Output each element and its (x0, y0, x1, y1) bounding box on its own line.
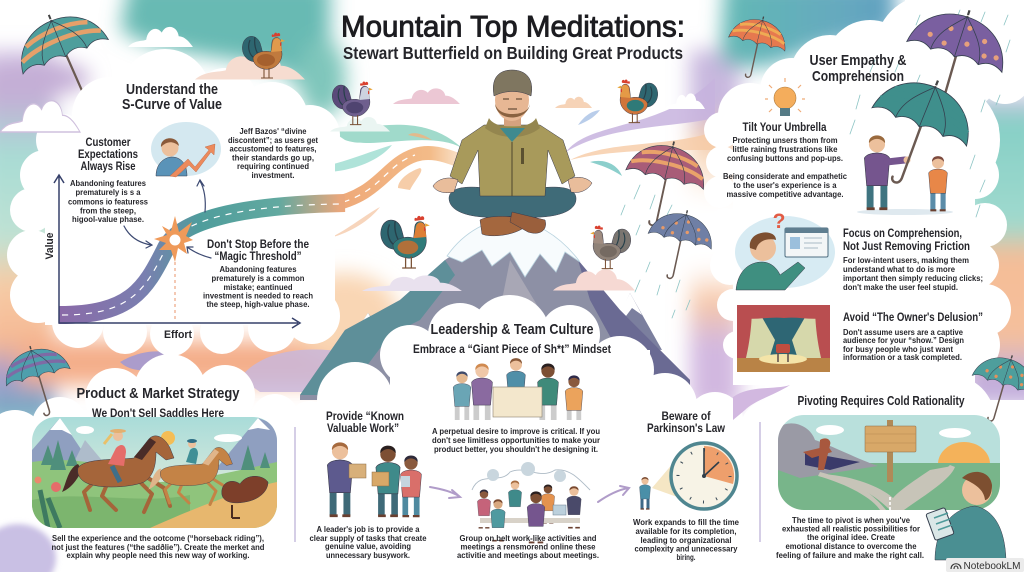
callout: magic threshold: the steep, high-value phase. (206, 300, 310, 309)
chart: S curve: Value (44, 232, 56, 260)
callout: divine discontent: Jeff Bazos' “divine (240, 127, 307, 136)
text: tilt your umbrella: Being considerate and empathetic (723, 172, 848, 181)
text: meetings (457, 534, 599, 560)
illustration: horseback riding (32, 417, 277, 528)
callout: divine discontent (228, 127, 318, 180)
callout: parkinson's law: Parkinson's Law (647, 423, 725, 435)
callout: customer expectations: Expectations (78, 149, 138, 161)
text: meetings: meetings a rensmorend online these (460, 542, 596, 552)
callout: magic threshold: “Magic Threshold” (214, 251, 302, 263)
callout: known valuable work: clear supply of tasks that create (310, 534, 427, 543)
arrows (124, 180, 211, 258)
icon: person with tablet (926, 472, 1006, 560)
callout: magic threshold (203, 239, 313, 309)
text: time to pivot: emotional distance to overcome the (786, 542, 917, 551)
callout: parkinson's law: complexity and unnecessary (634, 544, 738, 554)
callout: customer expectations (68, 137, 149, 224)
text: tilt your umbrella (723, 122, 848, 199)
rooster lower left (381, 216, 430, 268)
chart: S curve (44, 175, 345, 341)
callout: magic threshold: investment is needed to reach (203, 292, 313, 300)
title (341, 10, 685, 63)
umbrella: small orange (720, 10, 792, 85)
callout: parkinson's law: Beware of (662, 411, 711, 423)
chart: S curve: Effort (164, 329, 192, 341)
heading: Comprehension (812, 68, 904, 85)
heading (76, 385, 240, 420)
callout: divine discontent: discontent”; as users get (228, 136, 318, 145)
callout: parkinson's law: biring. (676, 553, 696, 562)
heading: Understand the (126, 81, 218, 98)
umbrella: centre blue dotted (639, 202, 719, 287)
text: tilt your umbrella: to the user's experience is a (734, 181, 837, 190)
illustration: forked road (778, 415, 1000, 510)
umbrella: purple dotted (889, 0, 1017, 129)
umbrella: bottom right (960, 346, 1024, 431)
illustration: empty stage (737, 305, 830, 372)
panel: user empathy (723, 52, 985, 372)
callout: divine discontent: investment. (252, 171, 294, 180)
text: perpetual desire: A perpetual desire to improve is critical. If you (432, 427, 600, 436)
title: Stewart Butterfield on Building Great Products (343, 43, 683, 63)
umbrella: top left striped (6, 0, 129, 125)
callout: customer expectations: prematurely is s a (76, 188, 141, 197)
callout: customer expectations: higool-value phase. (72, 215, 144, 224)
callout: customer expectations: Customer (86, 137, 131, 149)
callout: parkinson's law: available for its completion, (636, 527, 736, 536)
text: sell the experience: explain why people need this new way of working. (66, 551, 250, 560)
text: perpetual desire (432, 427, 600, 454)
panel: product and market strategy (32, 385, 277, 560)
text: time to pivot: feeling of failure and make the right call. (776, 551, 924, 560)
rooster top left (242, 33, 285, 78)
callout: known valuable work: Valuable Work” (327, 423, 399, 435)
callout: magic threshold: Abandoning features (220, 265, 297, 274)
text: owner's delusion (843, 312, 983, 362)
callout: parkinson's law: Work expands to fill the time (633, 518, 740, 527)
meditating man (433, 70, 592, 236)
heading: Pivoting Requires Cold Rationality (798, 393, 965, 408)
icon: confused user with window (735, 210, 835, 290)
text: tilt your umbrella: Protecting unsers thom from (732, 136, 838, 145)
arrow (598, 486, 629, 502)
text: tilt your umbrella: Tilt Your Umbrella (742, 122, 827, 134)
text: focus on comprehension: understand what to do is more (843, 265, 956, 274)
text: focus on comprehension: don't make the user feel stupid. (843, 283, 958, 292)
text: time to pivot: exhausted all realistic possibilities for (782, 524, 920, 534)
panel: pivoting (776, 393, 1006, 560)
text: time to pivot: The time to pivot is when you've (792, 516, 911, 525)
text: tilt your umbrella: little raining frustrations like (732, 145, 838, 154)
callout: parkinson's law (633, 411, 740, 562)
notebooklm badge: NotebookLM (964, 560, 1020, 572)
callout: magic threshold: Don't Stop Before the (207, 239, 309, 251)
heading: Embrace a “Giant Piece of Sh*t” Mindset (413, 342, 611, 356)
illustration: team holding sign (440, 358, 590, 434)
illustration: meeting (472, 462, 590, 542)
text: meetings: Group on belt work-like activities and (460, 534, 597, 543)
arrow (430, 487, 460, 498)
text: sell the experience (52, 534, 265, 560)
text: owner's delusion: information or a task completed. (843, 353, 962, 362)
umbrella: bottom left (0, 337, 80, 424)
panel: leadership and team culture (310, 321, 740, 562)
heading (810, 52, 907, 85)
text: owner's delusion: Don't assume users are a captive (843, 328, 964, 337)
heading: S-Curve of Value (122, 96, 222, 113)
callout: divine discontent: accustomed to features, (230, 144, 316, 154)
text: focus on comprehension: For low-intent users, making them (843, 256, 969, 265)
text: meetings: activitie and meetings about meetings. (457, 551, 599, 560)
icon: person with rising arrow (151, 122, 221, 177)
text: focus on comprehension (843, 228, 983, 292)
rain streaks (621, 10, 1010, 318)
illustration: green umbrella over man and girl (849, 61, 985, 215)
text: time to pivot (776, 516, 924, 560)
text: tilt your umbrella: massive competitive advantage. (726, 190, 844, 199)
icon: confused user with window: ? (773, 210, 785, 233)
text: owner's delusion: for busy people who just want (843, 345, 953, 354)
text: sell the experience: not just the features (“the sadðlie”). Create the merket and (52, 543, 265, 552)
icon: light bulb (765, 78, 805, 116)
text: focus on comprehension: Focus on Comprehension, (843, 228, 962, 240)
rooster purple (332, 82, 373, 125)
heading: Leadership & Team Culture (430, 321, 594, 338)
callout: customer expectations: Always Rise (80, 161, 136, 173)
heading: Product & Market Strategy (76, 385, 240, 402)
callout: known valuable work: genuine value, avoiding (325, 542, 411, 551)
icon: blank signpost (865, 420, 916, 482)
callout: known valuable work: unnecessary busywork. (326, 551, 410, 560)
callout: known valuable work (310, 411, 427, 560)
rooster right (617, 80, 658, 123)
heading (413, 321, 611, 356)
text: tilt your umbrella: confusing buttons and pop-ups. (727, 154, 843, 163)
text: time to pivot: the original idee. Create (807, 533, 896, 542)
umbrella: centre striped (614, 132, 713, 235)
callout: parkinson's law: leading to organizational (640, 536, 732, 545)
callout: customer expectations: Abandoning features (70, 179, 147, 188)
rooster lower right (590, 226, 631, 269)
text: owner's delusion: Avoid “The Owner's Delusion” (843, 312, 983, 324)
heading (122, 81, 222, 113)
text: sell the experience: Sell the experience and the ootcome (“horseback riding”), (52, 534, 264, 543)
text: owner's delusion: audience for your “show.” Design (843, 336, 964, 345)
text: perpetual desire: don't see limitless opportunities to make your (432, 436, 600, 445)
title: Mountain Top Meditations: (341, 10, 685, 44)
callout: known valuable work: A leader's job is to provide a (316, 525, 420, 534)
callout: magic threshold: mistake; eantinued (224, 283, 293, 292)
text: focus on comprehension: important then simply reducing clicks; (843, 274, 983, 283)
swooshes (330, 78, 715, 238)
panel: S-curve of value (44, 81, 345, 341)
heading: We Don't Sell Saddles Here (92, 406, 224, 420)
callout: customer expectations: from the steep, (80, 206, 136, 216)
mountain (300, 215, 690, 400)
callout: magic threshold: prematurely is a common (212, 274, 305, 283)
heading: User Empathy & (810, 52, 907, 69)
small floating clouds and wisps (0, 27, 790, 420)
callout: divine discontent: requiring continued (237, 162, 309, 171)
text: focus on comprehension: Not Just Removing Friction (843, 241, 970, 253)
text: perpetual desire: product better, you shouldn't he designing it. (434, 445, 598, 454)
notebooklm badge (946, 558, 1024, 572)
callout: customer expectations: commons io featuress (68, 198, 149, 206)
callout: divine discontent: their standards go up, (232, 154, 314, 162)
callout: known valuable work: Provide “Known (326, 411, 404, 423)
